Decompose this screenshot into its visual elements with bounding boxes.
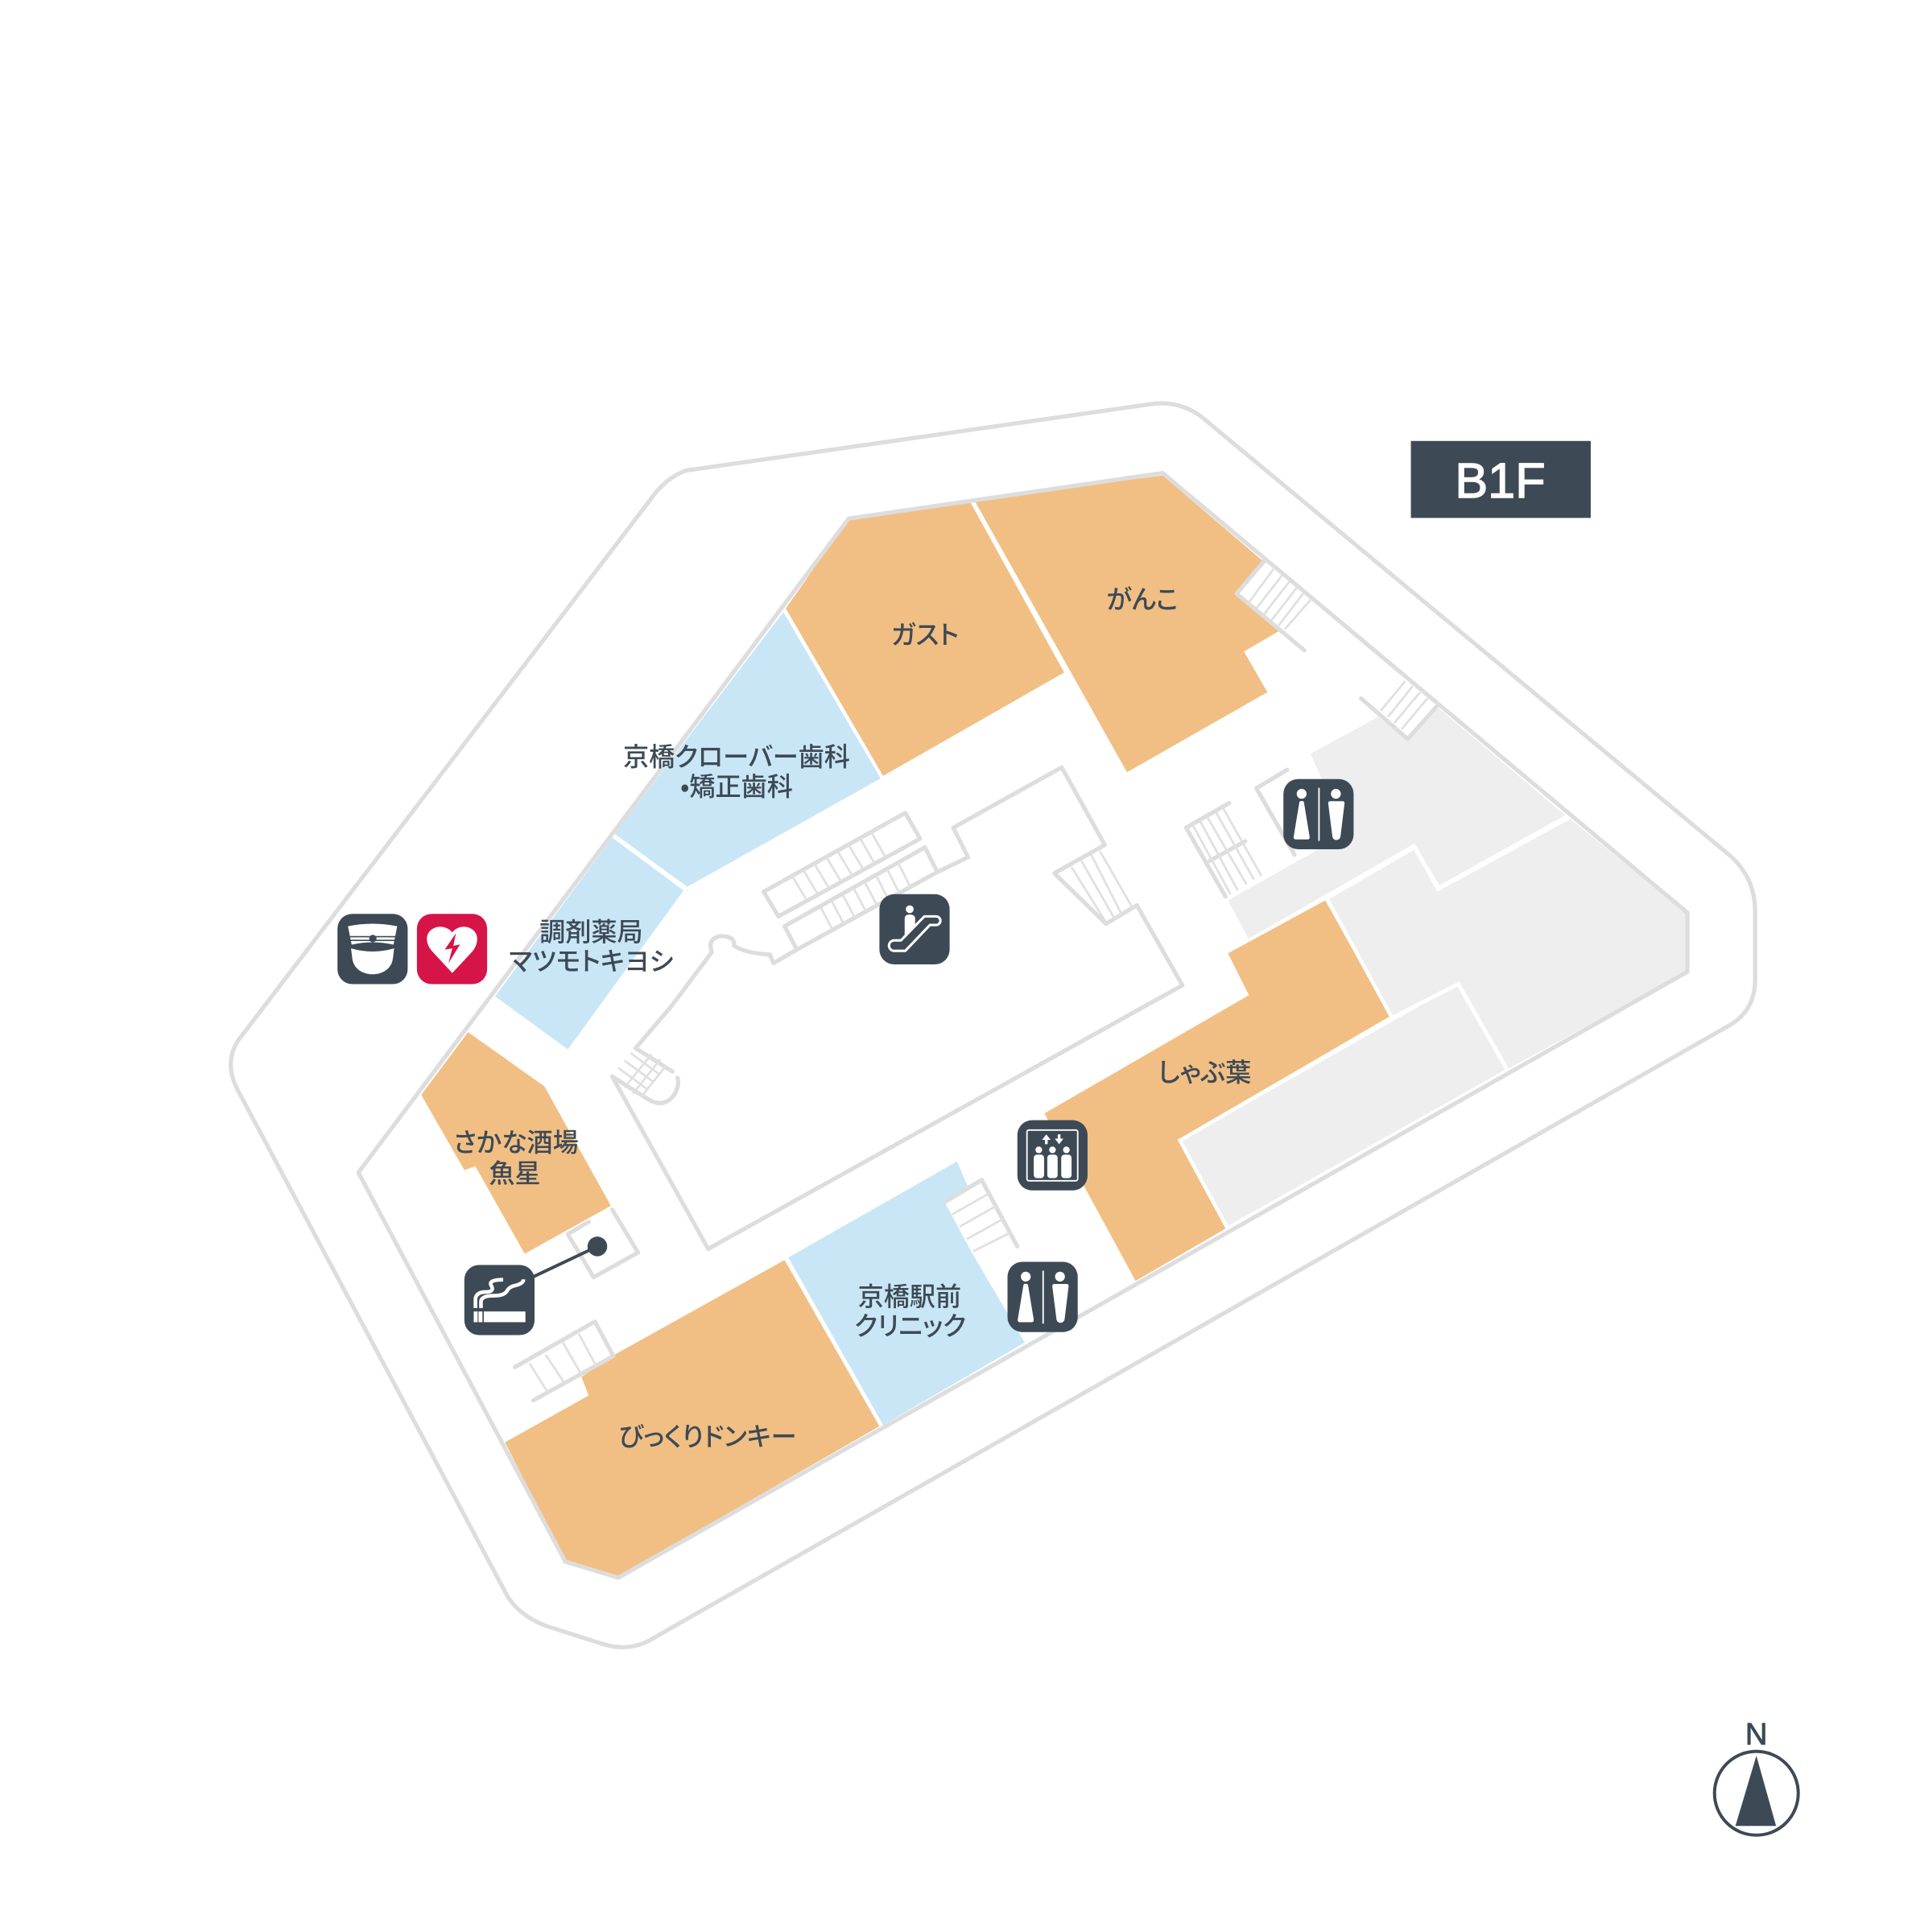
shop label: びっくりドンキー: びっくりドンキー bbox=[618, 1417, 796, 1454]
stairs: clinic bbox=[944, 1180, 1018, 1251]
shop label: 矯正歯科: •矯正歯科 bbox=[680, 766, 793, 803]
shop label: がんこ: がんこ bbox=[1106, 580, 1179, 617]
shop label: 京橋駅前: 京橋駅前 bbox=[858, 1277, 961, 1314]
outer site outline bbox=[231, 403, 1755, 1647]
compass bbox=[1715, 1717, 1798, 1835]
icon: restroom lower bbox=[1008, 1261, 1078, 1332]
shop: しゃぶ葉 bbox=[1044, 900, 1390, 1281]
icon: escalator bbox=[879, 894, 950, 964]
floor badge: B1F bbox=[1455, 453, 1546, 508]
icon: AED bbox=[417, 914, 487, 984]
stairs: atrium lower left bbox=[618, 1053, 667, 1096]
icon: elevator bbox=[1018, 1121, 1088, 1191]
compass: N bbox=[1745, 1717, 1768, 1752]
icon: police bbox=[337, 914, 407, 984]
smoking room outline bbox=[568, 1209, 638, 1278]
shop: 京橋駅前クリニック bbox=[788, 1162, 1025, 1425]
grey area: upper vacant zone bbox=[1228, 707, 1567, 939]
shop label: クリニック: クリニック bbox=[854, 1307, 966, 1344]
shop: さかな酒場 魚星 bbox=[421, 1032, 611, 1254]
icon: smoking bbox=[465, 1265, 535, 1335]
shop: 京橋クローバー歯科 bbox=[614, 612, 881, 887]
stairs: atrium right bbox=[1072, 851, 1133, 923]
atrium outline bbox=[612, 767, 1183, 1249]
shop label: マツモトキヨシ: マツモトキヨシ bbox=[509, 942, 673, 979]
restroom corridor wall bbox=[1257, 770, 1295, 855]
floor badge bbox=[1411, 441, 1591, 518]
shop: がんこ bbox=[974, 476, 1280, 772]
grey area: lower vacant zone bbox=[1180, 984, 1506, 1227]
shop label: 京橋クローバー歯科: 京橋クローバー歯科 bbox=[623, 737, 850, 774]
stairs: upper right bbox=[1361, 681, 1436, 739]
icon: restroom upper bbox=[1283, 779, 1353, 849]
shop: ガスト bbox=[786, 502, 1064, 776]
smoking area leader line bbox=[530, 1236, 607, 1278]
shop: 調剤薬局マツモトキヨシ bbox=[495, 837, 683, 1050]
white separator around しゃぶ葉 bbox=[1180, 898, 1392, 1229]
shop label: 魚星: 魚星 bbox=[489, 1154, 541, 1191]
stairs: by がんこ bbox=[1237, 562, 1311, 650]
escalator treads bbox=[764, 813, 968, 950]
shop: びっくりドンキー bbox=[505, 1260, 879, 1576]
building outline bbox=[358, 473, 1687, 1578]
shop label: しゃぶ葉: しゃぶ葉 bbox=[1158, 1052, 1251, 1089]
shop label: ガスト: ガスト bbox=[891, 615, 959, 652]
white separators between vacant zones bbox=[1246, 815, 1569, 1071]
shop label: さかな酒場: さかな酒場 bbox=[453, 1123, 579, 1160]
stairs: lower left bbox=[515, 1322, 613, 1401]
shop label: 調剤薬局: 調剤薬局 bbox=[539, 912, 643, 949]
grey area: right vacant zone bbox=[1329, 819, 1687, 1069]
stairs: centre right bbox=[1186, 803, 1262, 897]
